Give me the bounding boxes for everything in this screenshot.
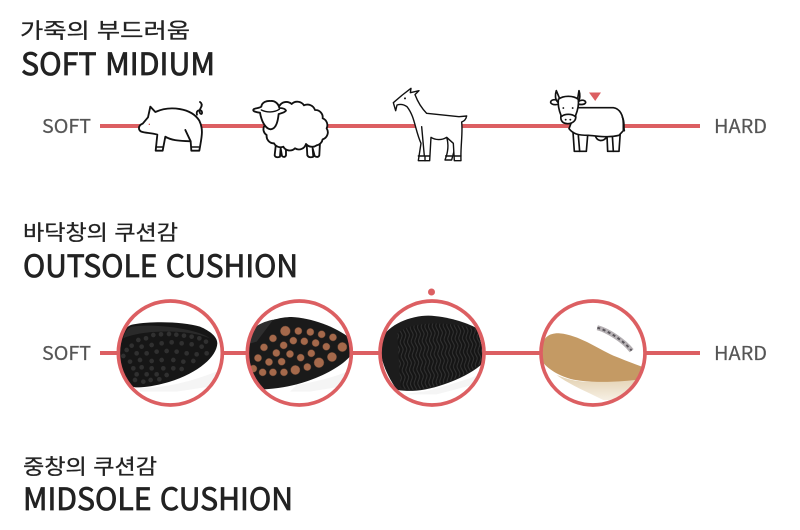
photo ring [247,301,351,405]
photo: black sole with copper studs [245,301,351,405]
scale line [100,351,700,355]
English heading: SOFT MIDIUM [21,39,215,84]
photo ring [118,301,222,405]
photo: black sole with dark studs [118,301,222,405]
marker: dot [428,288,435,296]
Korean heading: 가죽의 부드러움 [20,15,190,45]
icon: sheep [253,101,328,157]
icon: pig [139,102,202,151]
marker: triangle [589,92,601,101]
photo ring [541,301,645,405]
English heading: OUTSOLE CUSHION [23,241,298,286]
heading: outsole cushion [23,217,298,286]
photo: tan sole with jewel [541,301,647,405]
photo: black sole with wave tread [380,301,485,405]
photo ring [380,301,484,405]
icon: cow [551,91,624,151]
scale line [100,124,700,128]
label: soft: SOFT [42,339,91,366]
icon: goat [393,88,467,161]
heading: midsole cushion [23,451,293,519]
English heading: MIDSOLE CUSHION [23,474,293,519]
Korean heading: 중창의 쿠션감 [23,451,157,481]
scale: leather softness [42,88,767,161]
label: hard: HARD [714,339,767,366]
Korean heading: 바닥창의 쿠션감 [23,217,178,247]
scale: outsole cushion [42,288,767,405]
label: soft: SOFT [42,112,91,139]
label: hard: HARD [714,112,767,139]
heading: leather softness [20,15,215,84]
